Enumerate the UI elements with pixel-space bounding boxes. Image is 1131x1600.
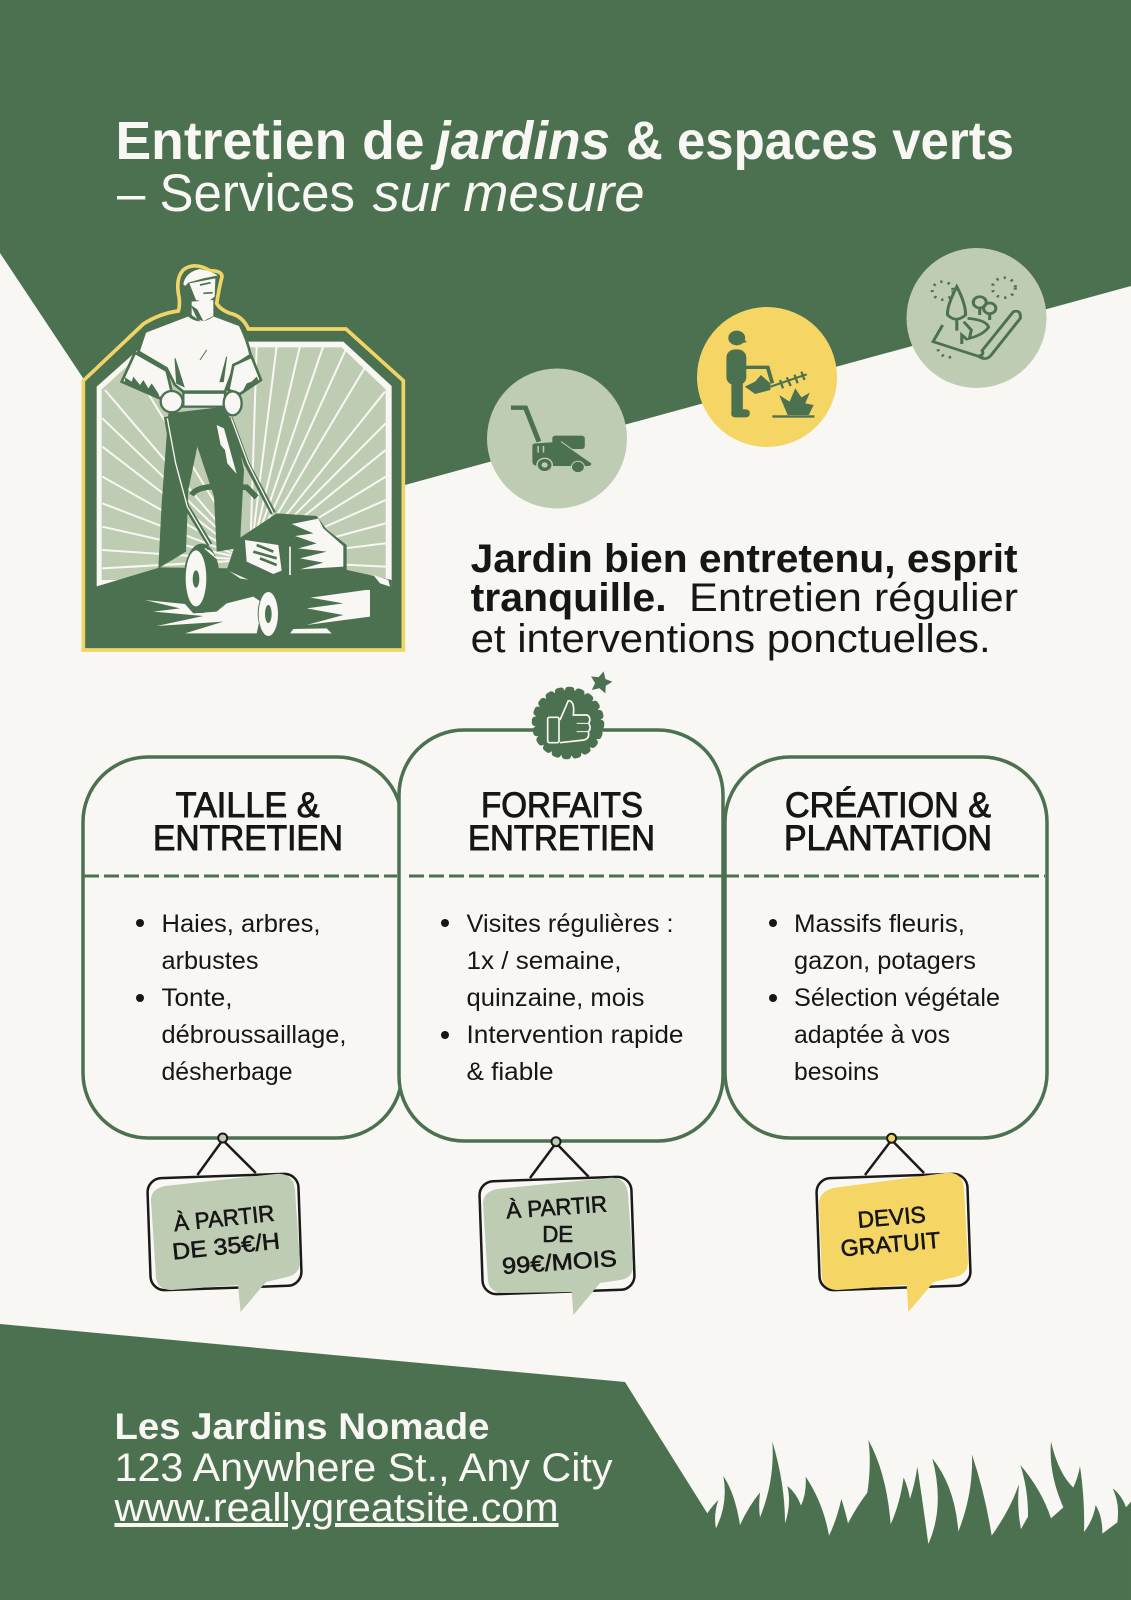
heading: forfaits entretien: ENTRETIEN [468, 819, 655, 858]
heading: taille et entretien: TAILLE & [176, 786, 320, 825]
panel: forfaits entretien [399, 730, 723, 1141]
title: – Services [117, 164, 355, 223]
list: taille et entretien: Tonte, [162, 984, 232, 1012]
heading: création et plantation: PLANTATION [784, 819, 992, 858]
price tag: devis gratuit [816, 1134, 971, 1312]
icon: thumbs up badge [535, 690, 601, 756]
icon: star [588, 669, 614, 694]
price tag: à partir de 99€/mois: À PARTIR [505, 1191, 608, 1223]
heading: création et plantation [784, 786, 992, 858]
list: forfaits entretien: quinzaine, mois [466, 984, 644, 1012]
list: forfaits entretien: Intervention rapide [466, 1021, 684, 1049]
heading: taille et entretien: ENTRETIEN [153, 819, 343, 858]
trousers [158, 407, 244, 568]
list: création et plantation: adaptée à vos [794, 1021, 950, 1049]
illustration: man with lawnmower badge [83, 266, 403, 650]
intro text: Jardin bien entretenu, esprit [471, 537, 1018, 581]
footer contact text [113, 1406, 613, 1530]
list: création et plantation [769, 910, 1000, 1086]
torso [138, 315, 251, 392]
heading: forfaits entretien [468, 786, 655, 858]
mower deck [227, 513, 390, 600]
icon: garden plan circle [906, 248, 1046, 388]
footer green shape with grass [0, 1324, 1131, 1600]
list: taille et entretien [136, 910, 346, 1086]
intro text: tranquille. [471, 576, 667, 620]
footer contact text: Les Jardins Nomade [114, 1406, 489, 1447]
price tag: devis gratuit: GRATUIT [840, 1227, 941, 1261]
intro text: et interventions ponctuelles. [471, 617, 991, 661]
title [116, 111, 1014, 223]
panel: taille et entretien [83, 757, 402, 1138]
price tag: à partir de 35€/h: À PARTIR [172, 1200, 276, 1236]
head [192, 300, 213, 322]
mower handle [167, 417, 273, 545]
price tag: à partir de 35€/h: DE 35€/H [171, 1227, 281, 1265]
badge outline [83, 266, 403, 650]
list: forfaits entretien [441, 910, 684, 1086]
grass streaks [145, 597, 263, 633]
list: création et plantation: Sélection végétale [794, 984, 1000, 1012]
list: taille et entretien: Haies, arbres, [162, 910, 320, 938]
intro text: Entretien régulier [689, 576, 1018, 620]
sun rays [102, 346, 386, 568]
heading: taille et entretien [153, 786, 343, 858]
heading: forfaits entretien: FORFAITS [481, 786, 643, 825]
panel: création et plantation [725, 757, 1047, 1138]
title: jardins [430, 111, 610, 171]
icon: hedge trimmer circle [697, 307, 837, 447]
price tag: à partir de 99€/mois [479, 1137, 635, 1315]
price tag: à partir de 99€/mois: DE [542, 1221, 573, 1247]
list: taille et entretien: désherbage [162, 1058, 292, 1086]
footer contact text: 123 Anywhere St., Any City [114, 1446, 612, 1490]
list: forfaits entretien: & fiable [466, 1058, 554, 1086]
ground [96, 567, 392, 638]
title: & espaces verts [626, 111, 1014, 171]
big wheel [184, 544, 220, 613]
arms [122, 353, 172, 398]
front wheel [258, 589, 288, 638]
intro text [471, 537, 1018, 661]
icon: lawnmower circle [487, 368, 627, 508]
title: sur mesure [373, 164, 645, 223]
price tag: à partir de 35€/h [147, 1134, 302, 1312]
list: création et plantation: besoins [794, 1058, 879, 1086]
list: forfaits entretien: 1x / semaine, [466, 947, 622, 975]
price tag: à partir de 99€/mois: 99€/MOIS [501, 1245, 618, 1279]
sunburst panel [97, 342, 392, 587]
title: Entretien de [116, 111, 424, 171]
waist [183, 393, 225, 407]
list: création et plantation: gazon, potagers [794, 947, 976, 975]
list: taille et entretien: arbustes [162, 947, 258, 975]
top green background shape [0, 0, 1131, 485]
footer contact text: www.reallygreatsite.com [113, 1486, 559, 1530]
heading: création et plantation: CRÉATION & [785, 786, 991, 825]
hands [161, 391, 183, 412]
price tag: devis gratuit: DEVIS [857, 1201, 927, 1233]
list: taille et entretien: débroussaillage, [162, 1021, 346, 1049]
list: forfaits entretien: Visites régulières : [466, 910, 674, 938]
list: création et plantation: Massifs fleuris, [794, 910, 965, 938]
